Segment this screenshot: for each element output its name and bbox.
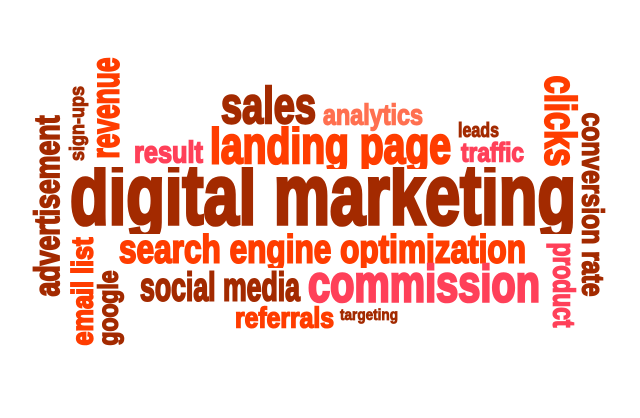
word: traffic: traffic — [461, 138, 524, 168]
word: clicks: clicks — [536, 76, 584, 166]
word: revenue: revenue — [84, 58, 128, 158]
word: result: result — [134, 134, 203, 170]
word: email list: email list — [66, 238, 100, 346]
word: analytics: analytics — [323, 100, 423, 132]
word: sales: sales — [221, 77, 316, 134]
word: search engine optimization: search engine optimization — [119, 228, 526, 272]
word: advertisement: advertisement — [28, 115, 67, 296]
word: landing page: landing page — [210, 117, 451, 175]
word: product: product — [546, 242, 582, 328]
word: targeting: targeting — [340, 307, 398, 324]
word: social media: social media — [140, 266, 300, 310]
word: conversion rate: conversion rate — [576, 112, 610, 296]
word: google: google — [92, 270, 124, 346]
word: referrals: referrals — [235, 302, 334, 334]
word: sign-ups: sign-ups — [67, 86, 89, 161]
word cloud — [32, 58, 606, 346]
word: leads: leads — [458, 120, 499, 142]
word: commission: commission — [308, 256, 540, 314]
